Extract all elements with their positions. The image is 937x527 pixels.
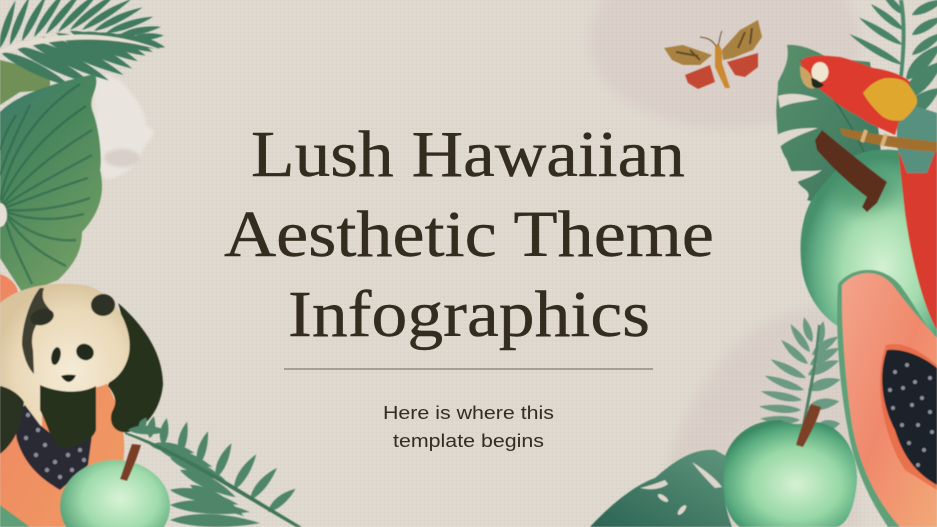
monstera leaf: bottom (590, 450, 732, 527)
parrot beak (811, 78, 824, 88)
panda ear (28, 306, 56, 328)
papaya seeds: left (16, 405, 92, 490)
title divider (284, 368, 653, 370)
large hosta leaf (0, 74, 102, 292)
watercolor wash: bottom right (660, 307, 860, 527)
papaya: behind panda (0, 274, 124, 527)
monstera leaf: parrot (776, 45, 882, 201)
butterfly antennae (700, 31, 722, 46)
subtitle: template begins (393, 431, 544, 451)
parrot perch (840, 128, 937, 152)
panda nose (61, 375, 76, 382)
splash shadow (104, 149, 140, 167)
panda (0, 284, 163, 432)
title: Infographics (288, 278, 650, 351)
leaf ribs (0, 84, 92, 284)
subtitle (383, 403, 554, 451)
palm frond: small (759, 316, 842, 436)
seed highlights (888, 363, 934, 467)
parrot head tan (800, 66, 815, 89)
apple stem (120, 444, 141, 481)
monstera slits (640, 462, 722, 516)
butterfly hindwings (685, 53, 758, 89)
panda left shoulder band (22, 288, 52, 374)
palm frond: top right (844, 0, 937, 125)
title: Aesthetic Theme (224, 198, 714, 271)
parrot teal wing (897, 100, 937, 173)
right illustration cluster (590, 0, 937, 527)
wing markings (676, 28, 752, 60)
parrot face (812, 62, 828, 82)
big apple (801, 150, 937, 340)
papaya seeds (882, 350, 937, 485)
olive back frond (0, 60, 50, 105)
title (224, 118, 714, 351)
panda eyes (50, 341, 97, 366)
apple stem (796, 404, 821, 447)
monstera slits (777, 94, 822, 183)
watercolor wash: top right (590, 0, 860, 128)
butterfly (664, 20, 762, 89)
apple shadow at stem (833, 168, 897, 212)
parrot red body (800, 56, 910, 135)
butterfly forewings (664, 20, 762, 65)
watercolor splash: left (94, 75, 154, 180)
monstera midrib (800, 60, 870, 165)
leaf hole (0, 203, 7, 227)
apple: bottom left (60, 444, 170, 527)
parrot (800, 56, 937, 330)
papaya seed cavity rim (880, 344, 937, 490)
panda front arm (40, 385, 96, 448)
panda head and body (0, 284, 130, 432)
panda ear (91, 294, 115, 316)
butterfly body (715, 44, 730, 88)
title: Lush Hawaiian (251, 118, 685, 191)
papaya flesh (842, 273, 937, 527)
palm frond: top left (0, 0, 167, 91)
left illustration cluster (0, 0, 302, 527)
apple stem: branch (815, 130, 887, 212)
panda right arm (108, 303, 163, 432)
papaya: right (837, 270, 937, 527)
apple: bottom right (722, 404, 857, 527)
palm frond: bottom left (125, 416, 302, 527)
panda back arm (0, 386, 24, 454)
papaya rind: bottom left (0, 505, 30, 527)
subtitle: Here is where this (383, 403, 554, 423)
parrot tail (898, 148, 937, 330)
parrot yellow wing (863, 78, 917, 121)
perch ropes (862, 130, 886, 146)
